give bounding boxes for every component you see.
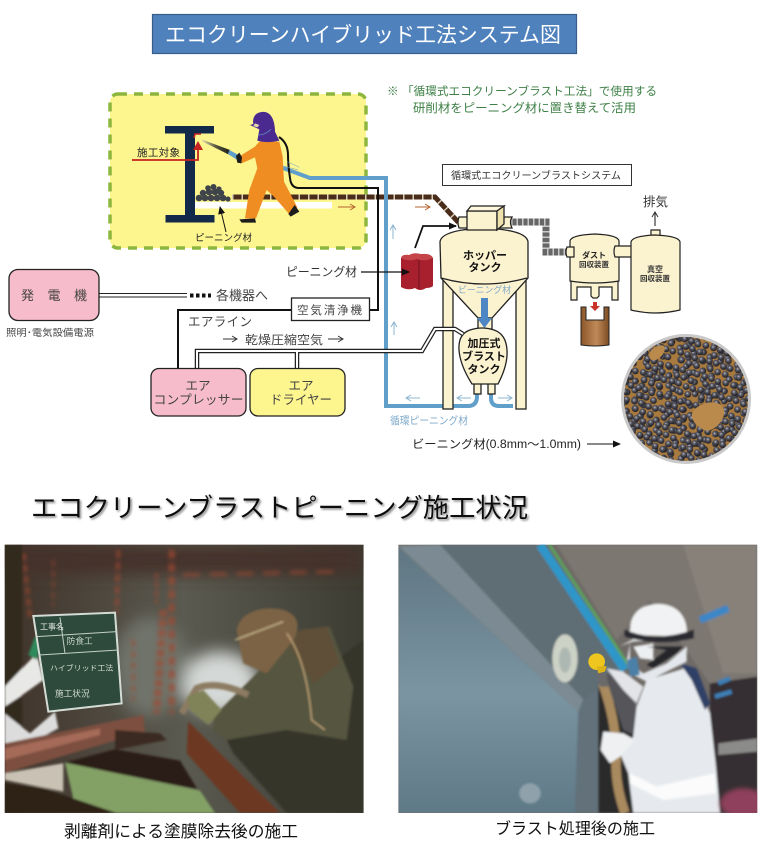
inset photo: peening shot xyxy=(622,336,750,462)
dry compressed air piping xyxy=(197,329,463,368)
black arrow into hopper xyxy=(415,226,456,248)
media label and arrow to container xyxy=(286,265,409,279)
i-beam target xyxy=(165,126,214,222)
peening media conveying hose xyxy=(232,197,459,223)
blue down arrow xyxy=(477,298,492,328)
section heading: エコクリーンブラストピーニング施工状況 xyxy=(31,493,528,523)
circulation flow arrows xyxy=(338,207,512,398)
exhaust label xyxy=(643,194,668,226)
circulating media label: 循環ピーニング材 xyxy=(390,414,468,427)
brown bucket xyxy=(581,307,609,346)
air line xyxy=(178,310,291,368)
media size label with arrow: ビーニング材(0.8mm～1.0mm) xyxy=(412,437,581,451)
generator xyxy=(9,270,99,320)
note: peening media replaces abrasive: ※ 「循環式エコクリーンブラスト工法」で使用する xyxy=(387,84,657,98)
photo: work after blasting xyxy=(398,545,767,818)
media pile xyxy=(196,184,231,202)
work sign board: 防食工 xyxy=(67,635,93,646)
work sign board xyxy=(33,613,122,712)
hopper tank xyxy=(440,206,528,329)
icon: worker with nozzle xyxy=(202,112,299,223)
media label and arrow to container: ピーニング材 xyxy=(286,265,357,279)
power cable to equipment xyxy=(99,288,268,303)
vacuum collector label: 回収装置 xyxy=(640,273,670,283)
panel: peening work area xyxy=(110,94,366,248)
gray dust hose xyxy=(511,222,566,252)
air line label: エアライン xyxy=(188,315,252,329)
generator: 発 電 機 xyxy=(21,288,87,303)
air cleaner box: 空気清浄機 xyxy=(297,303,362,317)
hopper label xyxy=(463,249,507,274)
air dryer: エア xyxy=(288,379,314,393)
air compressor: エア xyxy=(185,379,211,393)
black air line from worker to cleaner xyxy=(279,137,378,310)
icon: yellow nozzle xyxy=(588,653,607,673)
blast tank label: ブラスト xyxy=(462,349,506,363)
dust collector label xyxy=(579,250,609,269)
work sign board: 施工状況 xyxy=(55,688,90,699)
blue circulating hose xyxy=(283,168,513,406)
caption right photo: ブラスト処理後の施工 xyxy=(495,819,655,838)
system name box: 循環式エコクリーンブラストシステム xyxy=(451,169,621,182)
title xyxy=(152,14,576,54)
target label and red pointer: 施工対象 xyxy=(137,146,180,159)
red drop arrow xyxy=(590,302,600,311)
air compressor: コンプレッサー xyxy=(154,393,244,407)
exhaust label: 排気 xyxy=(643,194,668,209)
blast tank label xyxy=(462,336,506,376)
hopper media label: ビーニング材 xyxy=(458,284,511,295)
air dryer xyxy=(250,368,345,416)
photo: work after coating removal xyxy=(5,545,364,813)
red media container xyxy=(401,253,433,290)
power cable to equipment: 各機器へ xyxy=(216,288,268,303)
blast tank label: 加圧式 xyxy=(468,336,500,350)
vacuum collector label xyxy=(640,264,670,283)
pressurised blast tank xyxy=(459,328,507,394)
work sign board: 工事名 xyxy=(40,621,64,631)
vacuum collector xyxy=(631,230,680,313)
hopper tank legs xyxy=(443,278,526,409)
dry air label: 乾燥圧縮空気 xyxy=(245,332,323,347)
air compressor xyxy=(151,368,246,416)
generator caption: 照明･電気設備電源 xyxy=(6,327,95,339)
media label with arrow xyxy=(195,207,252,244)
work sign board: ハイブリッド工法 xyxy=(50,664,114,673)
title: エコクリーンハイブリッド工法システム図 xyxy=(165,24,561,47)
hopper label: タンク xyxy=(468,261,502,274)
system name box xyxy=(442,164,632,186)
hopper label: ホッパー xyxy=(463,249,507,262)
dust collector label: ダスト xyxy=(582,250,606,260)
media label with arrow: ピーニング材 xyxy=(195,232,252,244)
target label and red pointer xyxy=(132,134,203,160)
air dryer: ドライヤー xyxy=(270,393,332,407)
blast tank label: タンク xyxy=(468,363,500,376)
air cleaner box xyxy=(292,298,370,320)
dry air label xyxy=(223,332,343,347)
vacuum collector label: 真空 xyxy=(647,264,663,274)
dust collector label: 回収装置 xyxy=(579,259,609,269)
note: peening media replaces abrasive xyxy=(387,84,657,115)
caption left photo: 剥離剤による塗膜除去後の施工 xyxy=(64,822,298,841)
dust collector xyxy=(566,234,632,300)
note: peening media replaces abrasive: 研削材をピーニング材に置き替えて活用 xyxy=(413,101,636,115)
